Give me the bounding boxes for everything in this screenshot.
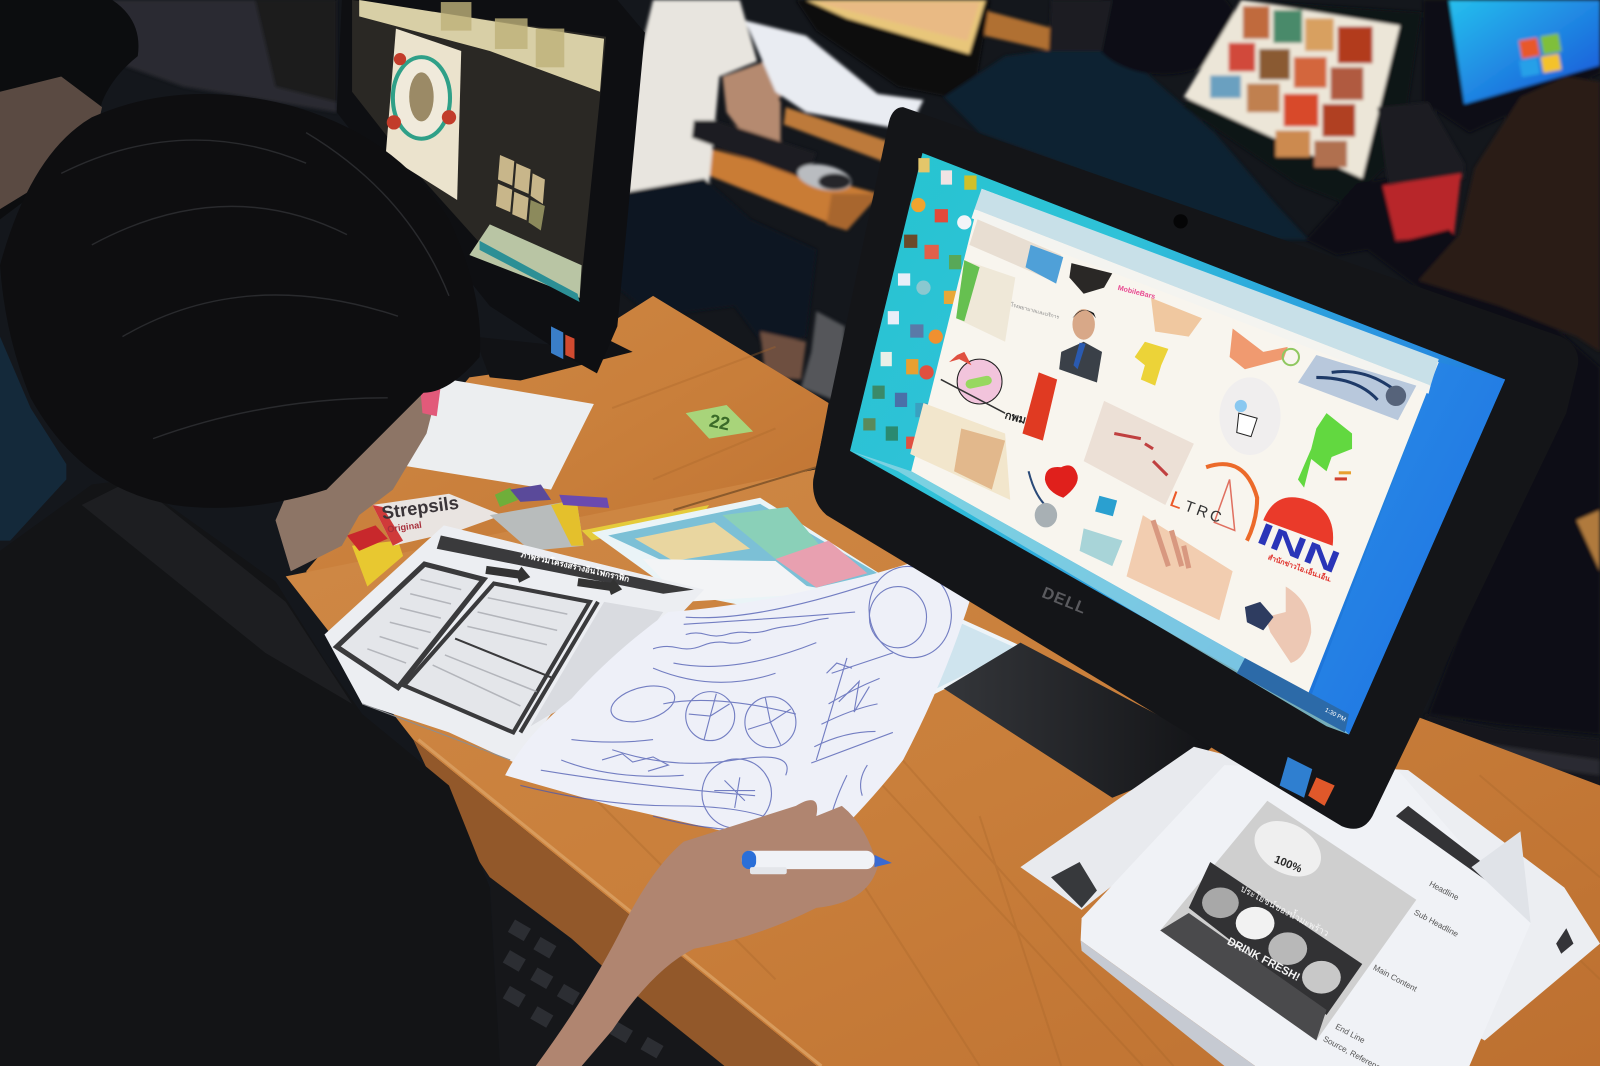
- annotation labels: Sub Headline: [1412, 908, 1460, 939]
- dental logo: [1219, 377, 1281, 455]
- hand photo tile: [1127, 515, 1233, 620]
- image search tiles: MobileBars: [1117, 284, 1156, 301]
- desk number tag: 22: [708, 410, 732, 434]
- bag and chair at right: [1378, 102, 1465, 184]
- infographic sample print: [1160, 801, 1416, 1040]
- hand holding bottle tile: [1245, 587, 1311, 663]
- wrappers and snacks on the desk: Strepsils: [380, 492, 460, 523]
- poster on left monitor: [386, 29, 461, 200]
- annotation labels: Headline: [1428, 879, 1461, 903]
- student in navy shirt: [944, 43, 1308, 240]
- infographic sample print: DRINK FRESH!: [1225, 936, 1302, 984]
- yellow Thailand map: [1135, 342, 1168, 386]
- printed form sheet: [324, 525, 704, 763]
- hardware stickers: [1280, 757, 1335, 806]
- thumbnail grid on left monitor: [496, 155, 545, 231]
- INN logo: สำนักข่าวไอ.เอ็น.เอ็น.: [1267, 551, 1333, 584]
- desk tray and keyboard bottom: [490, 877, 724, 1066]
- annotation labels: [1322, 879, 1461, 1066]
- handwritten notes sheet: [505, 538, 988, 853]
- stethoscope photo: [1298, 355, 1416, 420]
- desk number tag: [686, 405, 753, 439]
- pill logo: กพม.: [1003, 410, 1030, 428]
- browser window: [910, 189, 1439, 694]
- hands tile: [1080, 528, 1122, 566]
- top right monitor: [1184, 0, 1421, 204]
- chair lower right: [1423, 714, 1600, 811]
- red bar tile: [1022, 372, 1057, 441]
- printed form sheet: ภาพรวมโครงสร้างอินโฟกราฟิก: [520, 549, 630, 584]
- top centre monitor: [796, 0, 990, 97]
- far right monitor with blue desktop: [1423, 0, 1600, 133]
- webcam: [1173, 214, 1188, 229]
- papers on background desk: [745, 20, 923, 131]
- handwriting scribbles: [520, 557, 962, 836]
- wrappers and snacks on the desk: Original: [387, 520, 422, 534]
- INN logo: [1252, 497, 1345, 584]
- INN logo: INN: [1252, 517, 1345, 580]
- belly photo tile: [910, 403, 1010, 500]
- keyboard and mouse in background: [692, 120, 816, 180]
- main front desk: [286, 469, 1600, 1066]
- Dell logo: DELL: [1039, 584, 1089, 618]
- image search tiles: [910, 219, 1416, 663]
- black shirt: [0, 479, 500, 1066]
- pills photo tile: [1084, 401, 1194, 505]
- folded corner: [1471, 831, 1531, 923]
- taskbar on left monitor: [469, 224, 582, 298]
- infographic sample print: ประโยชน์ของน้ำมะพร้าว: [1239, 881, 1332, 939]
- LTRC logo: [1167, 464, 1257, 541]
- annotation labels: End Line: [1334, 1022, 1367, 1045]
- heart stethoscope tile: [1029, 465, 1078, 527]
- certificate behind the notes: [927, 610, 1022, 696]
- neighbouring student at far left: [0, 0, 138, 541]
- LTRC logo: L: [1167, 486, 1187, 514]
- main monitor stand: [944, 643, 1214, 798]
- hand holding pen: [536, 800, 878, 1066]
- student in foreground: [0, 0, 892, 1066]
- sheet of paper on upper desk: [400, 377, 594, 490]
- desktop wallpaper: [850, 153, 1505, 734]
- taskbar: [850, 451, 1349, 734]
- left monitor: [337, 0, 645, 380]
- face and neck: [276, 377, 441, 571]
- blue pen: [742, 851, 892, 874]
- right-hand print-outs: [1020, 747, 1600, 1066]
- printed poster under the papers: [592, 498, 886, 612]
- dark headline bar: [1396, 806, 1512, 898]
- green Thailand map: [1298, 413, 1352, 488]
- main monitor: 1:30 PM: [1324, 707, 1347, 723]
- LTRC logo: TRC: [1182, 498, 1226, 528]
- student with long hair: [1367, 230, 1600, 734]
- background classroom furniture and students: [112, 0, 1600, 811]
- wrappers and snacks on the desk: [347, 485, 709, 587]
- student in white shirt: [628, 0, 757, 194]
- main monitor: [813, 107, 1578, 829]
- background desk far: [985, 10, 1061, 51]
- desktop icons: [863, 158, 977, 449]
- black hair: [0, 94, 480, 508]
- portrait tile: [1059, 309, 1102, 383]
- image search tiles: โรงพยาบาลและบริการ: [1010, 301, 1060, 321]
- annotation labels: Main Content: [1372, 963, 1419, 994]
- pill logo: [941, 352, 1030, 428]
- stickers on left monitor: [551, 326, 574, 359]
- infographic sample print: 100%: [1272, 854, 1303, 876]
- upper desk: [306, 296, 829, 622]
